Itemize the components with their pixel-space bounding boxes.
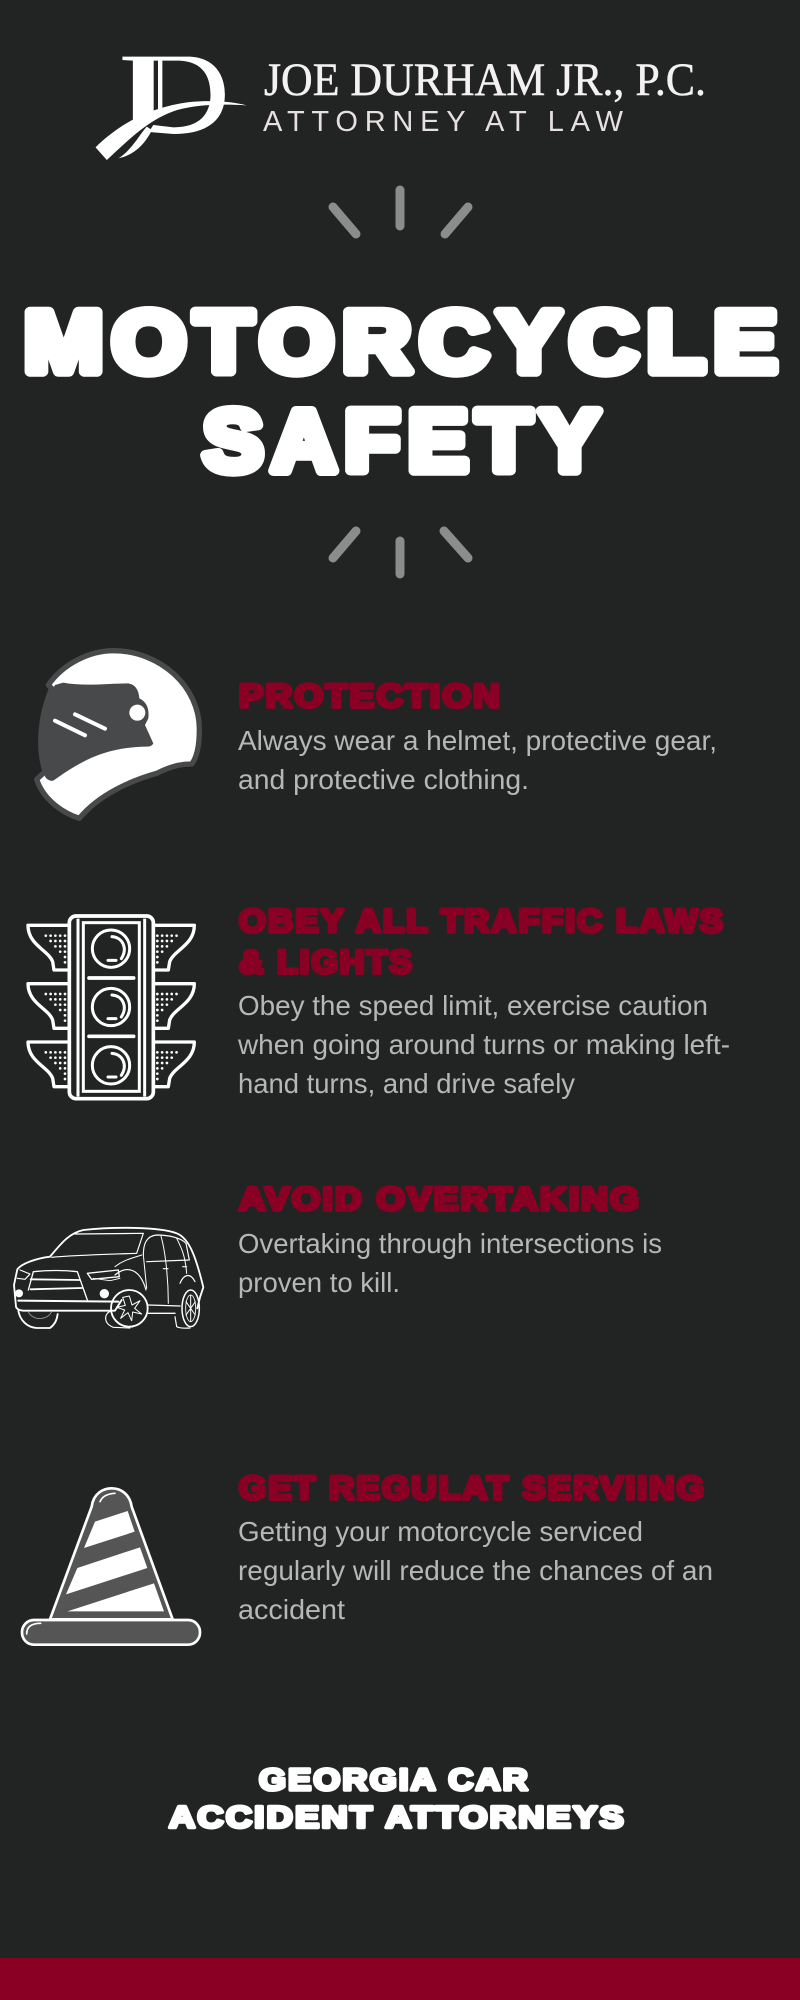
body: servicing: regularly will reduce the chances of an <box>238 1555 713 1586</box>
footer text: GEORGIA CAR <box>259 1762 530 1797</box>
section: traffic laws <box>237 903 730 1099</box>
footer text: ACCIDENT ATTORNEYS <box>169 1800 626 1834</box>
footer bar <box>0 1958 800 2000</box>
body: protection: and protective clothing. <box>238 764 529 795</box>
body: overtaking: proven to kill. <box>238 1267 400 1298</box>
body: traffic laws <box>237 990 730 1099</box>
body: overtaking <box>238 1228 662 1298</box>
logo name: JOE DURHAM JR., P.C. <box>264 54 706 106</box>
logo tagline: ATTORNEY AT LAW <box>263 106 624 138</box>
icon: car <box>14 1228 203 1328</box>
section: protection <box>238 678 717 795</box>
title <box>24 294 786 490</box>
logo <box>96 54 706 160</box>
body: traffic laws: when going around turns or making left- <box>237 1029 730 1060</box>
heading: traffic laws: & LIGHTS <box>239 944 414 980</box>
heading: traffic laws: OBEY ALL TRAFFIC LAWS <box>239 903 725 939</box>
body: protection: Always wear a helmet, protective gear, <box>238 725 717 756</box>
heading: protection: PROTECTION <box>239 678 502 714</box>
heading: servicing: GET REGULAT SERVIING <box>239 1470 706 1506</box>
body: servicing: accident <box>238 1594 345 1625</box>
heading: traffic laws <box>239 903 725 980</box>
title: MOTORCYCLE <box>24 294 786 390</box>
section: overtaking <box>238 1181 662 1298</box>
footer text <box>169 1762 626 1834</box>
icon: traffic light <box>28 916 194 1099</box>
body: servicing: Getting your motorcycle serviced <box>238 1516 643 1547</box>
title: SAFETY <box>203 394 608 490</box>
heading: overtaking: AVOID OVERTAKING <box>239 1181 641 1217</box>
body: traffic laws: hand turns, and drive safely <box>238 1068 575 1099</box>
section: servicing <box>238 1470 713 1625</box>
icon: helmet <box>37 651 199 818</box>
body: traffic laws: Obey the speed limit, exercise caution <box>238 990 708 1021</box>
logo icon: JD monogram <box>96 57 246 160</box>
body: protection <box>238 725 717 795</box>
decorative burst: top <box>333 190 468 234</box>
icon: traffic cone <box>22 1488 200 1645</box>
body: servicing <box>238 1516 713 1625</box>
decorative burst: bottom <box>333 531 468 574</box>
body: overtaking: Overtaking through intersections is <box>238 1228 662 1259</box>
